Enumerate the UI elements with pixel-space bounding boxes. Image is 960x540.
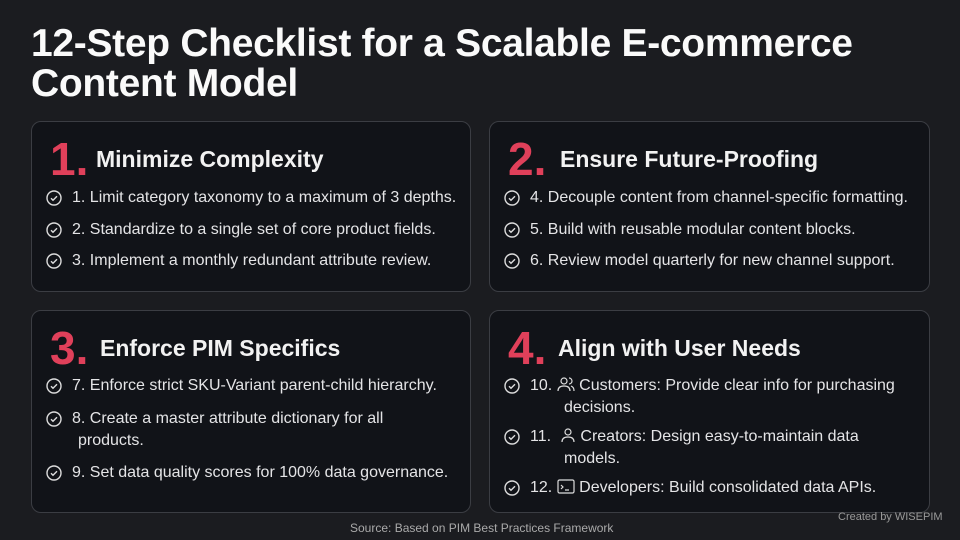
heading 3: [50, 322, 340, 374]
panel: PIM specifics: [31, 310, 471, 513]
item 11: [504, 428, 859, 467]
source note: Source: Based on PIM Best Practices Framework: [350, 521, 613, 535]
heading 4: Align with User Needs: [558, 334, 801, 360]
panel: minimize complexity: [31, 121, 471, 292]
title: 12-Step Checklist for a Scalable E-commerce: [31, 22, 853, 65]
item 7: 7. Enforce strict SKU-Variant parent-child hierarchy.: [72, 377, 437, 394]
item 6: 6. Review model quarterly for new channel support.: [530, 252, 895, 269]
credit: Created by WISEPIM: [838, 511, 943, 523]
heading 1: 1.: [50, 133, 88, 185]
item 11: 11. Creators: Design easy-to-maintain data: [530, 428, 859, 445]
item 10: [504, 377, 895, 416]
heading 4: [508, 322, 801, 374]
heading 1: Minimize Complexity: [96, 146, 323, 172]
heading 3: 3.: [50, 322, 88, 374]
item 1: 1. Limit category taxonomy to a maximum of 3 depths.: [72, 189, 456, 206]
heading 2: [508, 133, 818, 185]
item 10: decisions.: [564, 399, 635, 416]
item 8: [46, 410, 383, 449]
heading 4: 4.: [508, 322, 546, 374]
heading 1: [50, 133, 324, 185]
item 8: 8. Create a master attribute dictionary for all: [72, 410, 383, 427]
heading 2: Ensure Future-Proofing: [560, 146, 818, 172]
item 8: products.: [78, 432, 144, 449]
title: Content Model: [31, 62, 298, 105]
item 12: 12. Developers: Build consolidated data APIs.: [530, 479, 876, 496]
panel: user needs: [489, 310, 930, 513]
title: [31, 22, 853, 105]
item 5: 5. Build with reusable modular content blocks.: [530, 221, 856, 238]
item 10: 10. Customers: Provide clear info for purchasing: [530, 377, 895, 394]
item 11: models.: [564, 450, 620, 467]
heading 2: 2.: [508, 133, 546, 185]
item 9: 9. Set data quality scores for 100% data governance.: [72, 464, 448, 481]
heading 3: Enforce PIM Specifics: [100, 334, 340, 360]
panel: future-proofing: [489, 121, 930, 292]
item 3: 3. Implement a monthly redundant attribute review.: [72, 252, 431, 269]
item 4: 4. Decouple content from channel-specific formatting.: [530, 189, 908, 206]
item 2: 2. Standardize to a single set of core product fields.: [72, 221, 436, 238]
